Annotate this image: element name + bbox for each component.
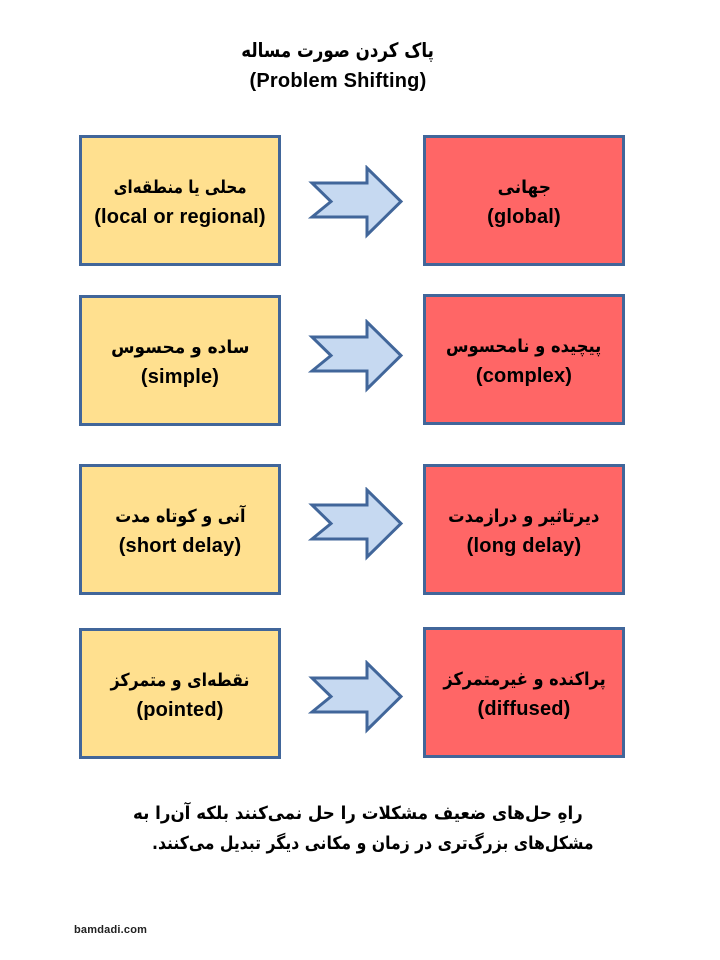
panel: diffused: (diffused): [477, 698, 571, 720]
conclusion text: [133, 802, 594, 854]
panel: long delay: دیرتاثیر و درازمدت: [448, 506, 600, 527]
panel: short delay: آنی و کوتاه مدت: [115, 506, 245, 527]
panel: complex: [423, 294, 625, 425]
title: (Problem Shifting): [250, 70, 426, 92]
arrow: row 4: [308, 660, 403, 734]
panel: simple: ساده و محسوس: [111, 337, 249, 358]
panel: local or regional: [79, 135, 281, 266]
panel: global: جهانی: [497, 177, 551, 198]
panel: short delay: (short delay): [119, 535, 241, 557]
panel: long delay: (long delay): [467, 535, 581, 557]
conclusion text: راهِ حل‌های ضعیف مشکلات را حل نمی‌کنند بلکه آن‌را به: [133, 803, 583, 824]
panel: simple: [79, 295, 281, 426]
panel: global: [423, 135, 625, 266]
title: [242, 38, 434, 92]
panel: pointed: (pointed): [136, 699, 224, 721]
arrow: row 2: [308, 319, 403, 392]
panel: diffused: پراکنده و غیرمتمرکز: [443, 669, 605, 690]
source credit: bamdadi.com: [74, 924, 147, 936]
panel: simple: (simple): [141, 366, 219, 388]
panel: pointed: نقطه‌ای و متمرکز: [110, 670, 250, 691]
panel: short delay: [79, 464, 281, 595]
panel: diffused: [423, 627, 625, 758]
panel: global: (global): [487, 206, 561, 228]
panel: local or regional: (local or regional): [94, 206, 266, 228]
panel: pointed: [79, 628, 281, 759]
conclusion text: مشکل‌های بزرگ‌تری در زمان و مکانی دیگر تبدیل می‌کنند.: [152, 833, 594, 854]
panel: complex: (complex): [476, 365, 572, 387]
title: پاک کردن صورت مساله: [242, 38, 434, 62]
arrow: row 1: [308, 165, 403, 238]
panel: local or regional: محلی یا منطقه‌ای: [114, 177, 246, 198]
arrow: row 3: [308, 487, 403, 560]
panel: complex: پیچیده و نامحسوس: [446, 336, 602, 357]
panel: long delay: [423, 464, 625, 595]
